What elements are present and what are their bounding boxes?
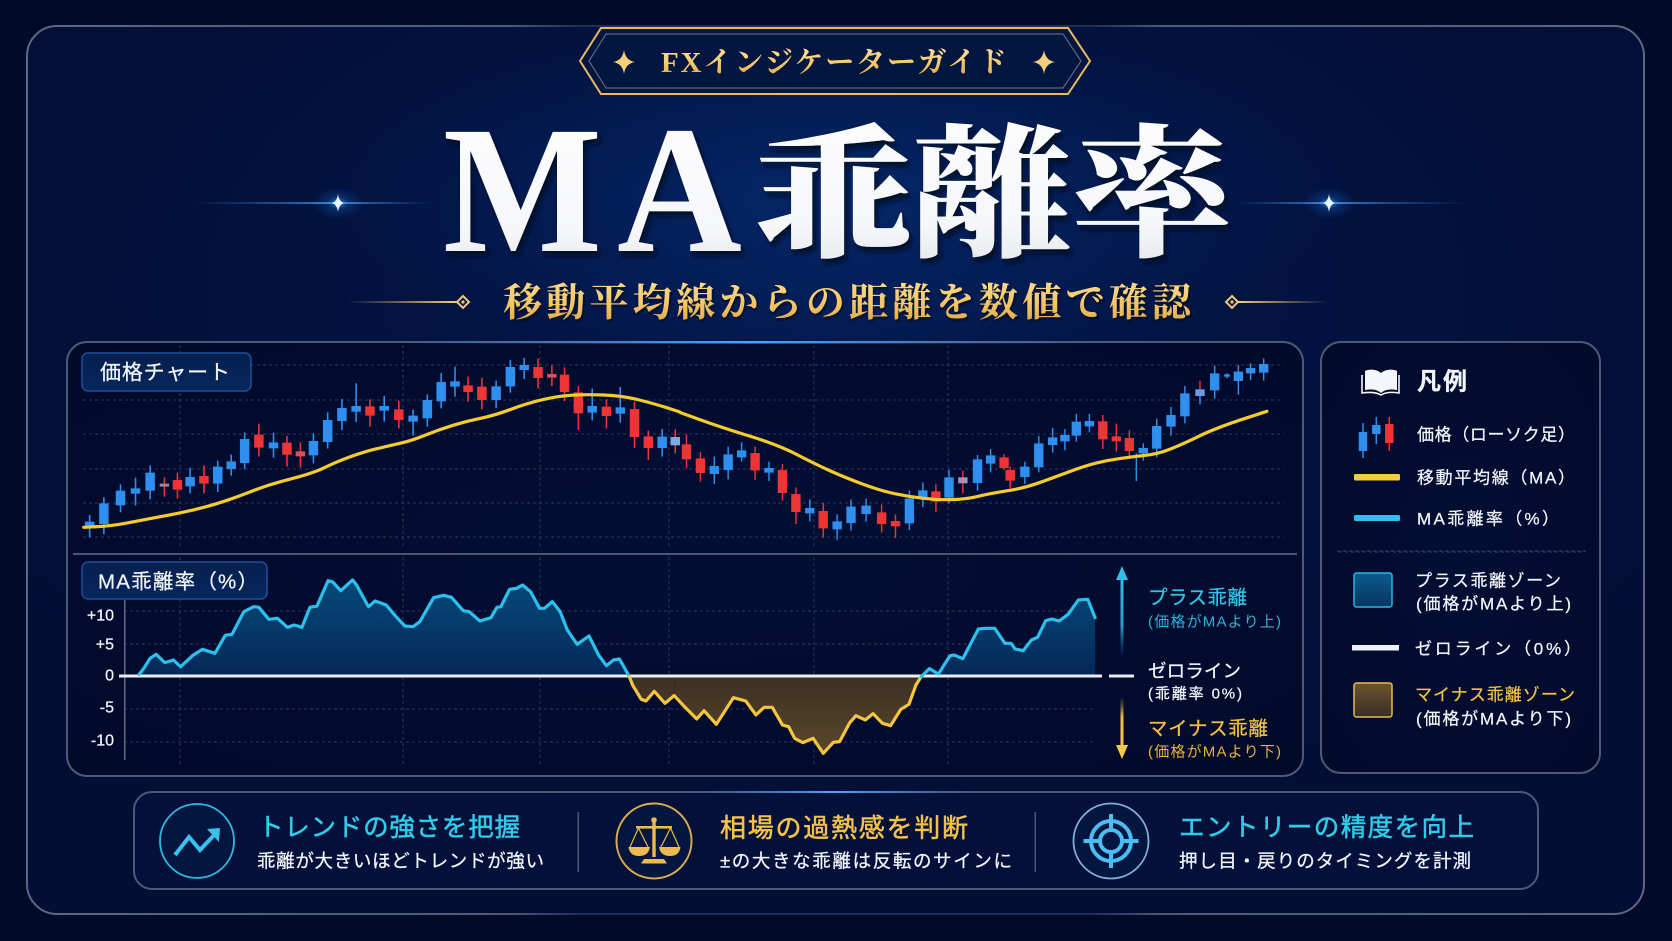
legend: minus label: マイナス乖離ゾーン: [1415, 686, 1575, 704]
y axis: 0: [105, 668, 114, 684]
zero line: [119, 674, 1102, 678]
icon: right sparkle: [1033, 50, 1055, 74]
candlesticks: [90, 358, 1264, 540]
y axis: +5: [96, 636, 114, 654]
icon: left sparkle: [613, 50, 635, 74]
panel: chart: [67, 341, 1303, 776]
annotation: minus: マイナス乖離: [1148, 718, 1268, 740]
legend: zero label: ゼロライン（0%）: [1415, 640, 1581, 658]
benefit 3 text: エントリーの精度を向上: [1179, 814, 1474, 842]
moving average line: [84, 395, 1267, 527]
title glow: [316, 20, 1356, 360]
label: MA deviation: [82, 562, 267, 599]
light flare left: [192, 187, 432, 219]
annotation: zero: [1148, 660, 1242, 702]
icon: scales: [616, 804, 692, 878]
legend: deviation label: MA乖離率（%）: [1417, 510, 1559, 528]
title: A: [617, 90, 742, 291]
annotation: minus: [1148, 718, 1281, 760]
subtitle: [347, 272, 1329, 328]
label: price chart: 価格チャート: [100, 362, 230, 384]
legend: minus label: [1415, 686, 1575, 728]
icon: target: [1074, 804, 1148, 878]
label: MA deviation: MA乖離率（%）: [98, 570, 258, 594]
legend: zero bar: [1352, 645, 1399, 650]
benefit 2 text: ±の大きな乖離は反転のサインに: [720, 850, 1012, 872]
legend: plus label: (価格がMAより上): [1416, 594, 1571, 614]
y axis: -5: [100, 700, 114, 716]
label: price chart: [82, 353, 251, 391]
subtitle right ornament: [1226, 296, 1329, 308]
badge: FX indicator guide: [580, 28, 1090, 94]
benefit 3 text: [1179, 814, 1474, 872]
zero dash: [1109, 674, 1134, 678]
legend: candles: [1363, 417, 1389, 458]
subtitle text: 移動平均線からの距離を数値で確認: [503, 272, 1194, 328]
oscillator lines: [139, 580, 1095, 753]
legend: MA bar: [1354, 474, 1400, 480]
subtitle left ornament: [347, 296, 469, 308]
benefit 2 text: 相場の過熱感を判断: [720, 813, 968, 843]
annotation: zero: (乖離率 0%): [1148, 686, 1242, 702]
badge text: FXインジケーターガイド: [661, 47, 1007, 79]
legend: candles label: 価格（ローソク足）: [1417, 426, 1575, 444]
icon: trend: [160, 804, 234, 878]
annotation: minus: (価格がMAより下): [1148, 744, 1281, 760]
title: M: [443, 89, 602, 290]
legend: plus swatch: [1354, 573, 1392, 607]
title: 率: [1072, 79, 1238, 287]
legend: minus swatch: [1354, 683, 1392, 717]
panel: benefits: [134, 791, 1538, 889]
legend: MA label: 移動平均線（MA）: [1417, 468, 1575, 488]
oscillator areas: [139, 580, 1095, 753]
annotation: zero: ゼロライン: [1148, 660, 1241, 682]
benefit 1 text: 乖離が大きいほどトレンドが強い: [257, 850, 544, 872]
title: 離: [912, 79, 1072, 287]
annotation: plus: [1148, 587, 1281, 630]
annotation: plus: プラス乖離: [1148, 587, 1247, 609]
y axis: +10: [87, 608, 114, 624]
benefit 2 text: [720, 813, 1012, 872]
icon: book: [1362, 370, 1399, 395]
grid: [83, 345, 1284, 765]
panel: legend: [1321, 342, 1600, 773]
legend: minus label: (価格がMAより下): [1416, 710, 1571, 728]
title: 乖: [753, 79, 913, 287]
benefit 3 text: 押し目・戻りのタイミングを計測: [1179, 850, 1471, 872]
legend: plus label: プラス乖離ゾーン: [1415, 572, 1561, 590]
benefit 1 text: トレンドの強さを把握: [258, 814, 520, 842]
arrow: plus: [1116, 566, 1128, 658]
divider: [73, 553, 1297, 555]
y axis: -10: [91, 732, 114, 750]
y axis: [87, 600, 126, 760]
annotation: plus: (価格がMAより上): [1148, 614, 1281, 630]
legend: plus label: [1415, 572, 1571, 614]
title: [443, 79, 1238, 291]
benefit 1 text: [257, 814, 544, 872]
arrow: minus: [1116, 697, 1128, 759]
legend: deviation bar: [1354, 515, 1400, 521]
light flare right: [1236, 187, 1466, 219]
legend title: 凡例: [1417, 368, 1467, 396]
